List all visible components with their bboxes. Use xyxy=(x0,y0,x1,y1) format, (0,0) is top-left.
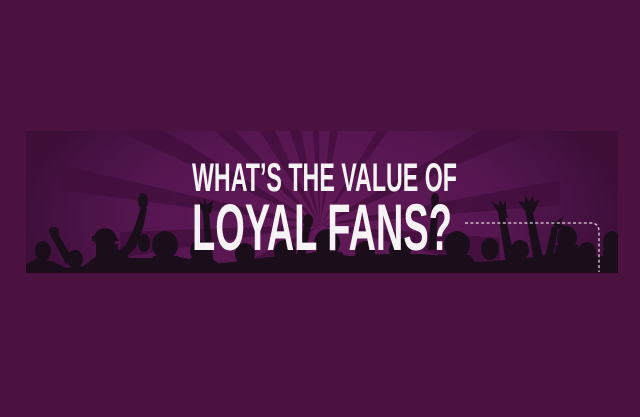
raised arms xyxy=(118,208,147,256)
sunburst rays xyxy=(88,131,556,262)
crowd silhouette xyxy=(26,193,621,273)
crowd base xyxy=(26,252,618,273)
banner xyxy=(26,131,621,273)
infographic canvas xyxy=(26,131,618,273)
banner gradient panel xyxy=(26,131,618,273)
title line 2: LOYAL FANS? xyxy=(192,190,452,264)
title line 1: WHAT’S THE VALUE OF xyxy=(192,156,457,200)
title xyxy=(192,156,457,264)
dotted connector line xyxy=(465,223,599,272)
raised hands xyxy=(138,193,148,209)
heads xyxy=(35,241,51,261)
